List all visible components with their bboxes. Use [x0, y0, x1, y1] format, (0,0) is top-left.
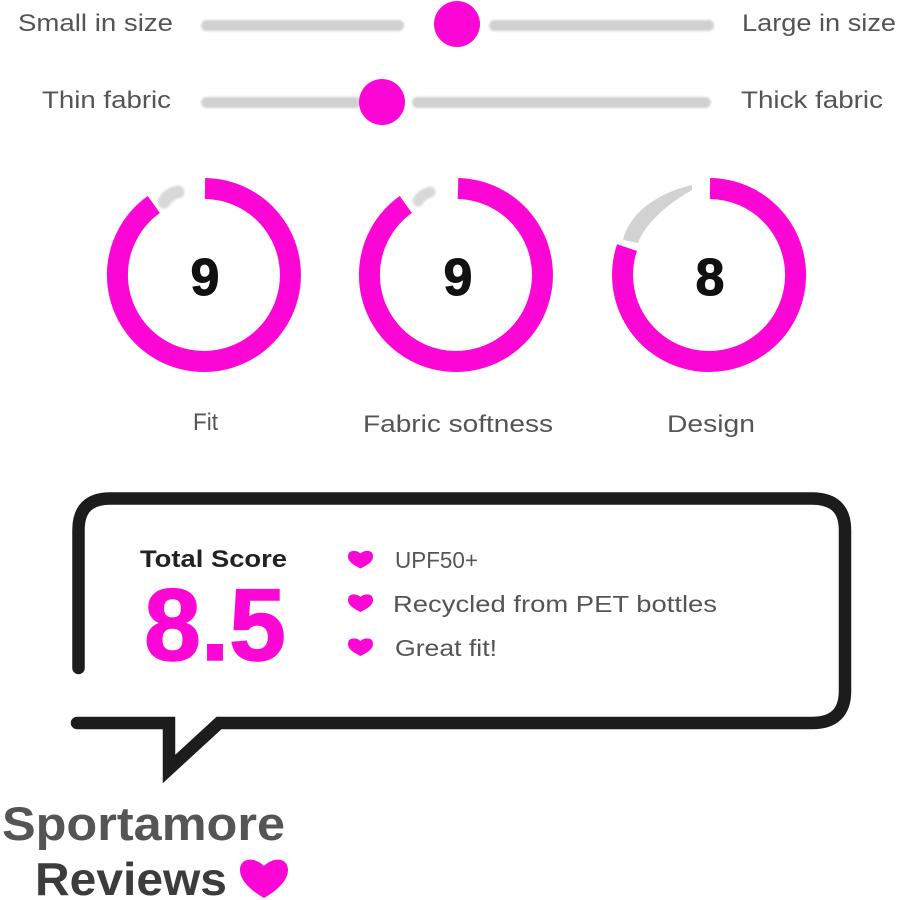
total score: Total Score	[140, 546, 287, 573]
icon: heart	[348, 551, 373, 568]
brand logo	[2, 797, 288, 900]
feature: UPF50+: UPF50+	[395, 547, 478, 573]
feature list	[348, 547, 717, 661]
slider: size: Large in size	[742, 10, 896, 37]
slider: fabric thickness	[42, 79, 883, 125]
total score: 8.5	[144, 568, 286, 682]
donut: fabric softness: 9	[444, 249, 472, 307]
donut: design: 8	[696, 249, 724, 307]
donut: design: Design	[667, 411, 755, 438]
donut: fit	[117, 188, 290, 436]
donut: fabric softness	[363, 188, 553, 438]
slider: size: Small in size	[18, 10, 173, 37]
slider: size	[18, 1, 896, 47]
brand logo: Sportamore	[2, 797, 285, 850]
icon: logo heart	[240, 860, 288, 898]
donut: fabric softness: Fabric softness	[363, 411, 553, 438]
feature: great fit: Great fit!	[395, 635, 497, 661]
speech bubble	[77, 498, 845, 769]
feature: recycled: Recycled from PET bottles	[393, 591, 717, 617]
icon: heart	[348, 638, 373, 656]
slider: fabric thickness: Thick fabric	[741, 87, 883, 114]
donut: fit: 9	[191, 249, 219, 307]
icon: heart	[348, 594, 373, 612]
slider: fabric thickness: Thin fabric	[42, 87, 171, 114]
donut: design	[623, 185, 796, 438]
donut: fit: Fit	[193, 409, 218, 436]
